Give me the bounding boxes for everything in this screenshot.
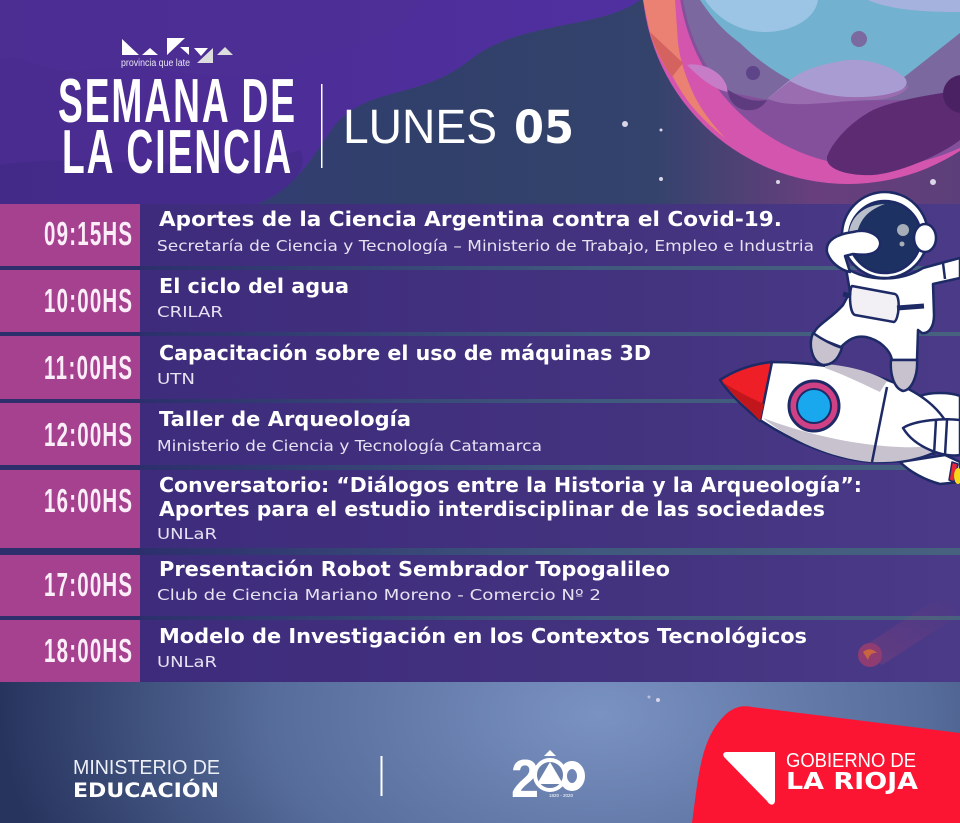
footer: Ministerio de Educación <box>73 757 220 802</box>
row 17:00: Presentación Robot Sembrador Topogalileo <box>159 557 670 581</box>
footer: Ministerio de Educación: MINISTERIO DE <box>73 757 220 779</box>
row 09:15 <box>0 204 960 266</box>
row separators <box>0 204 960 682</box>
row 18:00 <box>0 620 960 682</box>
planet orange ring <box>643 0 730 143</box>
row 09:15: Aportes de la Ciencia Argentina contra el Covid-19. <box>159 207 782 231</box>
row 11:00: 11:00HS <box>44 349 132 386</box>
astronaut backpack <box>850 286 899 322</box>
row 12:00 <box>0 403 960 465</box>
astronaut helmet <box>842 192 928 278</box>
row 11:00 <box>0 336 960 399</box>
heading divider and day <box>321 84 574 168</box>
row 18:00: UNLaR <box>157 653 217 671</box>
row 18:00: 18:00HS <box>44 632 132 669</box>
planet surface <box>683 0 960 110</box>
rocket window <box>789 381 839 431</box>
row 16:00: Aportes para el estudio interdisciplinar de las sociedades <box>159 497 825 521</box>
row 10:00: 10:00HS <box>44 282 132 319</box>
row 16:00: 16:00HS <box>44 482 132 519</box>
row 12:00: 12:00HS <box>44 416 132 453</box>
row 11:00: UTN <box>157 370 195 388</box>
title: SEMANA DE <box>58 66 295 135</box>
rocket <box>720 362 960 484</box>
row 16:00: Conversatorio: “Diálogos entre la Historia y la Arqueología”: <box>159 473 862 497</box>
heading divider and day: LUNES <box>343 101 497 154</box>
rocket nose <box>720 362 772 421</box>
row 10:00: CRILAR <box>157 303 223 321</box>
stars <box>622 121 936 702</box>
row 16:00: UNLaR <box>157 525 217 543</box>
white triangle icon <box>723 752 775 805</box>
footer: Gobierno de La Rioja: GOBIERNO DE <box>786 750 916 772</box>
row 17:00 <box>0 555 960 616</box>
logo: 200 years: 1820 - 2020 <box>549 793 574 798</box>
row 17:00: 17:00HS <box>44 566 132 603</box>
row 10:00 <box>0 270 960 332</box>
astronaut feet <box>811 333 842 365</box>
rocket body <box>760 362 955 462</box>
footer: Gobierno de La Rioja: LA RIOJA <box>786 767 919 795</box>
astronaut arm <box>827 231 880 272</box>
rocket side fin <box>903 419 960 456</box>
planet <box>642 0 960 184</box>
title <box>58 66 295 186</box>
row 18:00: Modelo de Investigación en los Contextos Tecnológicos <box>159 624 807 648</box>
row 12:00: Taller de Arqueología <box>159 407 411 431</box>
red tab <box>692 706 960 823</box>
planet dark blob <box>827 90 960 175</box>
row 12:00: Ministerio de Ciencia y Tecnología Catamarca <box>157 437 542 455</box>
logo: La Rioja provincia que late: provincia que late <box>121 58 190 69</box>
planet lens <box>687 64 727 92</box>
row 09:15: Secretaría de Ciencia y Tecnología – Ministerio de Trabajo, Empleo e Industria <box>157 237 814 255</box>
logo: 200 years <box>511 749 581 809</box>
title: LA CIENCIA <box>62 117 291 186</box>
row 10:00: El ciclo del agua <box>159 274 349 298</box>
astronaut <box>811 192 960 391</box>
rocket rear fins <box>920 393 960 432</box>
astronaut body <box>813 258 960 360</box>
row 11:00: Capacitación sobre el uso de máquinas 3D <box>159 341 651 365</box>
logo: La Rioja provincia que late <box>121 38 233 69</box>
rocket flame <box>949 462 958 482</box>
logo: 200 years: 2 <box>511 749 539 809</box>
planet shadow wedge <box>650 32 683 77</box>
row 09:15: 09:15HS <box>44 215 132 252</box>
footer: Ministerio de Educación: EDUCACIÓN <box>73 778 219 802</box>
heading divider and day: 05 <box>514 101 574 154</box>
comet <box>858 600 960 667</box>
schedule table <box>0 204 960 682</box>
row 16:00 <box>0 470 960 548</box>
footer: Gobierno de La Rioja <box>692 706 960 823</box>
footer divider <box>380 756 382 796</box>
row 17:00: Club de Ciencia Mariano Moreno - Comercio Nº 2 <box>157 586 601 604</box>
